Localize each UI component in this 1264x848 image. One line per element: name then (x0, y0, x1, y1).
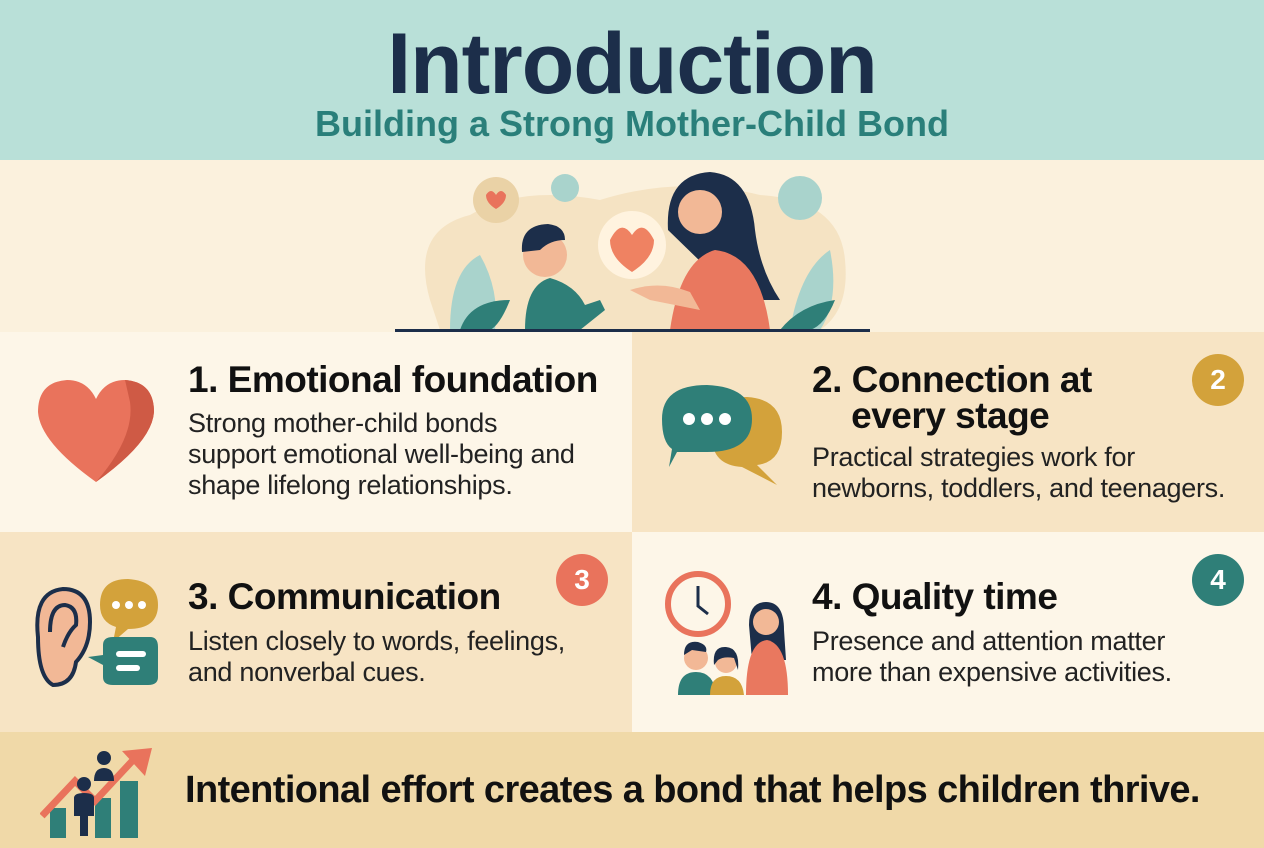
heading 3: 3. Communication (188, 576, 501, 617)
text 2 (812, 442, 1225, 503)
icon: heart (38, 380, 154, 482)
text 1 (188, 408, 575, 500)
subtitle: Building a Strong Mother-Child Bond (315, 103, 949, 144)
text 4: more than expensive activities. (812, 657, 1172, 687)
heading 2: 2. Connection at (812, 359, 1092, 400)
panel 2: connection (632, 332, 1264, 532)
panel 1: emotional foundation (0, 332, 632, 532)
hero illustration (0, 160, 1264, 332)
text 4 (812, 626, 1172, 687)
heading 2 (812, 359, 1092, 436)
text 2: Practical strategies work for (812, 442, 1135, 472)
badge 2 (1192, 354, 1244, 406)
text 2: newborns, toddlers, and teenagers. (812, 473, 1225, 503)
panel 3: communication (0, 532, 632, 732)
text 1: shape lifelong relationships. (188, 470, 513, 500)
icon: growth chart (40, 748, 152, 838)
badge 4 (1192, 554, 1244, 606)
badge 4: 4 (1210, 564, 1226, 595)
heading 2: every stage (851, 395, 1049, 436)
badge 2: 2 (1210, 364, 1226, 395)
heading 4: 4. Quality time (812, 576, 1057, 617)
icon: ear and bubbles (35, 579, 158, 687)
heading 1: 1. Emotional foundation (188, 359, 598, 400)
panel 4: quality time (632, 532, 1264, 732)
footer (0, 732, 1264, 848)
badge 3 (556, 554, 608, 606)
text 3: Listen closely to words, feelings, (188, 626, 565, 656)
text 1: Strong mother-child bonds (188, 408, 497, 438)
footer text: Intentional effort creates a bond that helps children thrive. (185, 769, 1200, 811)
title: Introduction (387, 16, 877, 112)
header (0, 0, 1264, 160)
text 1: support emotional well-being and (188, 439, 575, 469)
icon: chat bubbles (662, 385, 782, 485)
badge 3: 3 (574, 564, 590, 595)
icon: clock and family (665, 571, 788, 695)
text 3 (188, 626, 565, 687)
text 4: Presence and attention matter (812, 626, 1165, 656)
text 3: and nonverbal cues. (188, 657, 425, 687)
